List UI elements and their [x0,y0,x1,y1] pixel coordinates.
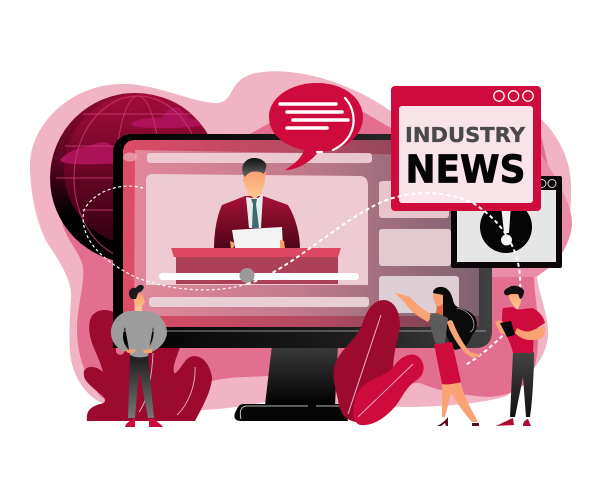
background blob: light pink [30,71,571,411]
window buttons [494,91,533,101]
presenter [214,158,300,249]
globe clouds [60,107,202,164]
presenter shirt and tie [246,194,263,228]
presenter hair [242,158,266,177]
sweater [111,311,167,357]
pointing arm [395,293,432,322]
cloud reflection [123,152,137,162]
legs [510,352,534,417]
tablet [500,321,515,337]
man with tablet [495,286,545,426]
headline: industry: INDUSTRY [405,123,526,147]
monitor screen [123,140,479,327]
news window [391,86,541,211]
headline: news: NEWS [406,148,526,192]
monitor [113,134,492,421]
heels [437,417,479,426]
monitor bezel [113,134,492,348]
arms [495,320,545,340]
icon: exclamation mark [480,201,532,253]
presenter paper [232,227,283,248]
speech bubble [269,83,363,170]
alert window [451,176,562,268]
legs [128,355,154,418]
hair [129,285,144,299]
neck and head [133,294,145,311]
plant: right leaves [333,300,424,425]
legs [442,383,478,422]
torso [430,313,448,344]
globe [50,93,220,263]
video progress bar [159,268,359,283]
face [433,293,443,306]
presenter head [243,172,266,199]
man standing [111,285,167,427]
plant: left [84,310,212,421]
monitor base [234,404,348,421]
presenter suit [214,196,300,249]
shirt [502,307,545,353]
shoes [496,418,531,426]
other arm [447,320,482,358]
illustration: industry news scene [30,71,572,427]
right panels [379,181,449,218]
background blob: mid pink [480,150,572,277]
monitor stand [265,345,338,405]
hair [433,287,477,350]
screen bottom strip [149,297,369,307]
shoes [125,419,163,427]
news desk [171,248,341,284]
hands [125,349,152,353]
bubble text lines [280,98,354,152]
globe grid [56,96,192,254]
screen main panel [146,174,368,285]
screen top strip [147,153,372,163]
skirt [434,342,461,384]
dotted route line: right [247,193,520,365]
hair [504,286,524,299]
dotted route line: left [83,186,247,290]
neck [436,303,443,316]
face [508,292,522,308]
background blob: dark pink [62,110,560,398]
front leaf [353,355,424,425]
woman pointing [395,287,482,426]
